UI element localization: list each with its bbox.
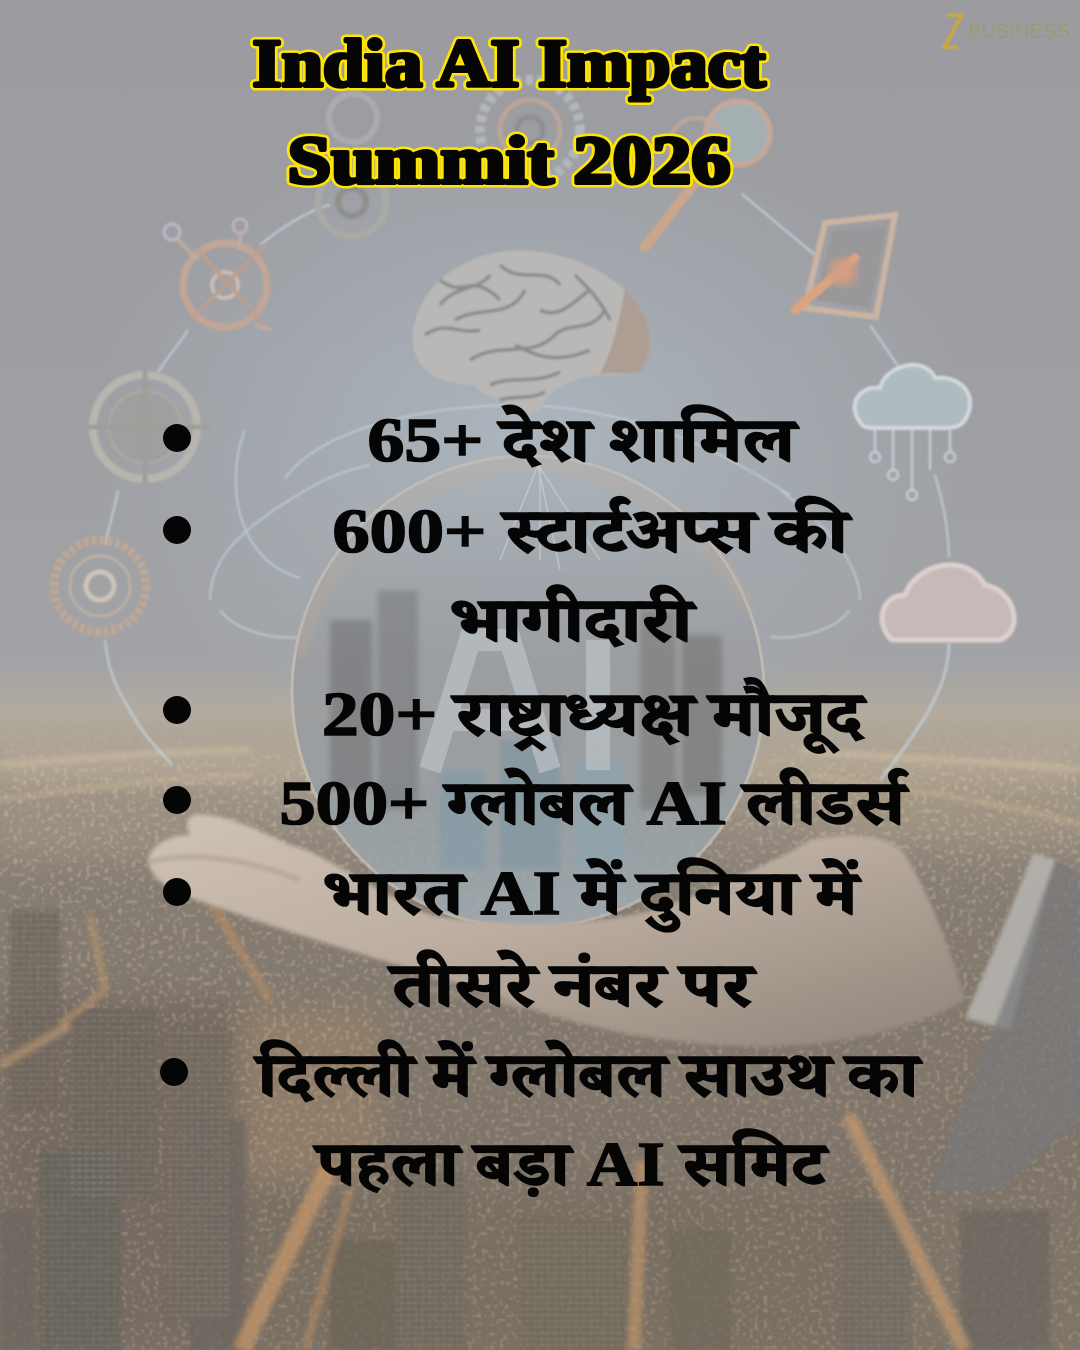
title: Summit 2026 (288, 122, 730, 198)
open hand (148, 815, 1080, 1190)
bullet 2: भागीदारी (450, 585, 697, 655)
bullet 2: 600+ स्टार्टअप्स की (332, 496, 853, 566)
bullet 6 (160, 1040, 923, 1199)
bullet 1: 65+ देश शामिल (368, 405, 799, 475)
bullet 6: पहला बड़ा AI समिट (313, 1129, 829, 1199)
ring and orbits (105, 194, 949, 780)
brain (413, 250, 650, 419)
bullet 1 (163, 405, 799, 475)
bullet 5 (163, 858, 862, 1020)
bullet 4 (163, 768, 909, 838)
title: India AI Impact (252, 25, 766, 101)
bullet list (160, 405, 923, 1199)
icon: gears left (54, 80, 580, 632)
city buildings (0, 910, 1050, 1350)
bullet 3: 20+ राष्ट्राध्यक्ष मौजूद (322, 677, 867, 753)
crystal sphere with AI letters (292, 456, 764, 928)
bullet 5: भारत AI में दुनिया में (323, 858, 862, 932)
title: Summit 2026 (288, 122, 730, 198)
title: India AI Impact (252, 25, 766, 101)
logo: Z Business (944, 15, 1070, 47)
icon: magnifier and tablet (645, 101, 895, 317)
title (252, 25, 766, 198)
bullet 5: तीसरे नंबर पर (387, 950, 757, 1020)
city lights horizon (0, 720, 1080, 1350)
logo: Z Business: BUSINESS (968, 20, 1070, 43)
icon: clouds (855, 365, 1014, 640)
bullet 4: 500+ ग्लोबल AI लीडर्स (280, 768, 909, 838)
bullet 3 (163, 677, 867, 753)
bullet 2 (163, 496, 853, 655)
bullet 6: दिल्ली में ग्लोबल साउथ का (253, 1040, 923, 1110)
